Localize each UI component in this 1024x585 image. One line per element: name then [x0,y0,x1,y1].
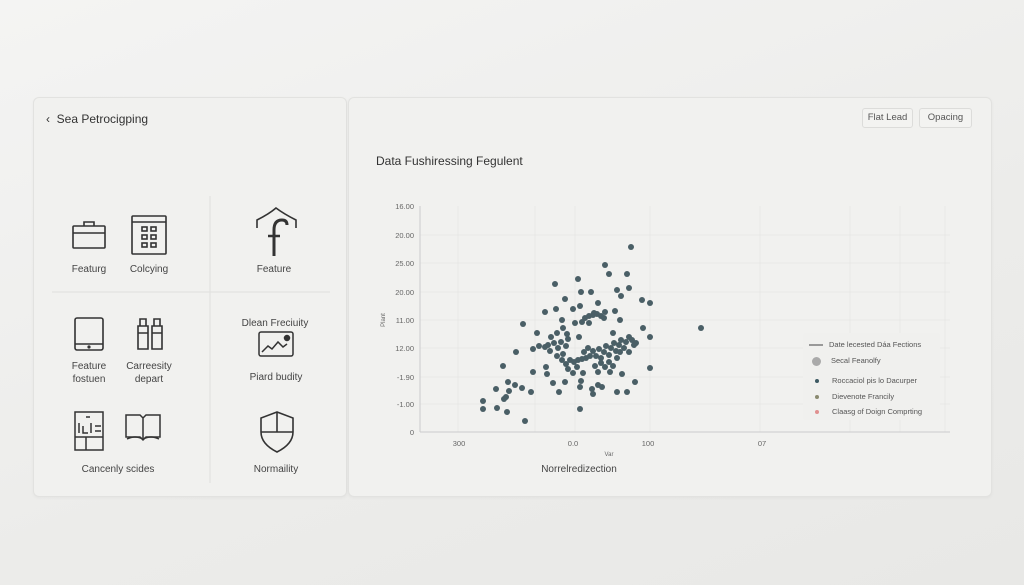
label: Carreesity depart: depart [135,374,163,385]
y axis labels: -1.90 [397,373,414,382]
icon: bottles [137,318,163,350]
button: Opacing: Opacing [928,112,963,123]
y axis labels: 20.00 [395,288,414,297]
x axis labels [453,439,766,458]
icon: tablet [74,317,104,351]
legend item: pink dot: Claasg of Doign Comprting [832,407,922,416]
x axis labels: 300 [453,439,465,448]
x axis labels: Var [605,452,613,458]
icon: picture [258,331,294,357]
legend [803,333,940,420]
label: Feature fostuen [72,361,106,385]
label: Carreesity depart: Carreesity [126,361,172,372]
y axis labels: 11.00 [396,316,414,325]
icon: calendar grid [131,215,167,255]
y axis labels: 16.00 [395,202,414,211]
legend item: big circle [812,356,881,366]
x axis title: Norrelredizection [541,464,617,475]
panel: left features [33,97,347,497]
legend item: line: Date lecested Dáa Fections [829,340,921,349]
grid dividers [52,196,330,483]
legend item: teal dot: Roccaciol pis lo Dacurper [832,376,917,385]
y axis labels: 0 [410,428,414,437]
y axis labels: Plant [381,313,387,327]
label: Normaility: Normaility [254,464,298,475]
icon: briefcase [72,221,106,249]
y axis labels [381,202,414,437]
label: Featurg: Featurg [72,264,106,275]
label: Dlean Freciuity: Dlean Freciuity [242,318,308,329]
label: Carreesity depart [126,361,172,385]
label: Feature: Feature [257,264,291,275]
clusters [545,342,551,348]
icon: open book [125,414,161,441]
data points [480,244,704,424]
label: Piard budity: Piard budity [250,372,302,383]
panel: chart [348,97,992,497]
label: Cancenly scides: Cancenly scides [82,464,154,475]
label: Feature fostuen: Feature [72,361,106,372]
x axis labels: 07 [758,439,766,448]
label: Colcying: Colcying [130,264,168,275]
y axis labels: 20.00 [395,231,414,240]
button: Flat Lead: Flat Lead [868,112,907,123]
y axis labels: 25.00 [395,259,414,268]
y axis labels: -1.00 [397,400,414,409]
icon: shield [260,411,294,453]
label: Feature fostuen: fostuen [73,374,105,385]
icon: building plan [74,411,104,451]
x axis labels: 100 [642,439,654,448]
button: Opacing [919,108,972,128]
legend item: big circle: Secal Feanolfy [831,356,881,365]
button: Flat Lead [862,108,913,128]
heading: back link: ‹ Sea Petrocigping [46,112,148,126]
y axis labels: 12.00 [395,344,414,353]
x axis labels: 0.0 [568,439,578,448]
chart title: Data Fushiressing Fegulent [376,154,523,168]
legend item: olive dot: Dievenote Francily [832,392,894,401]
icon: f arch [256,207,297,256]
